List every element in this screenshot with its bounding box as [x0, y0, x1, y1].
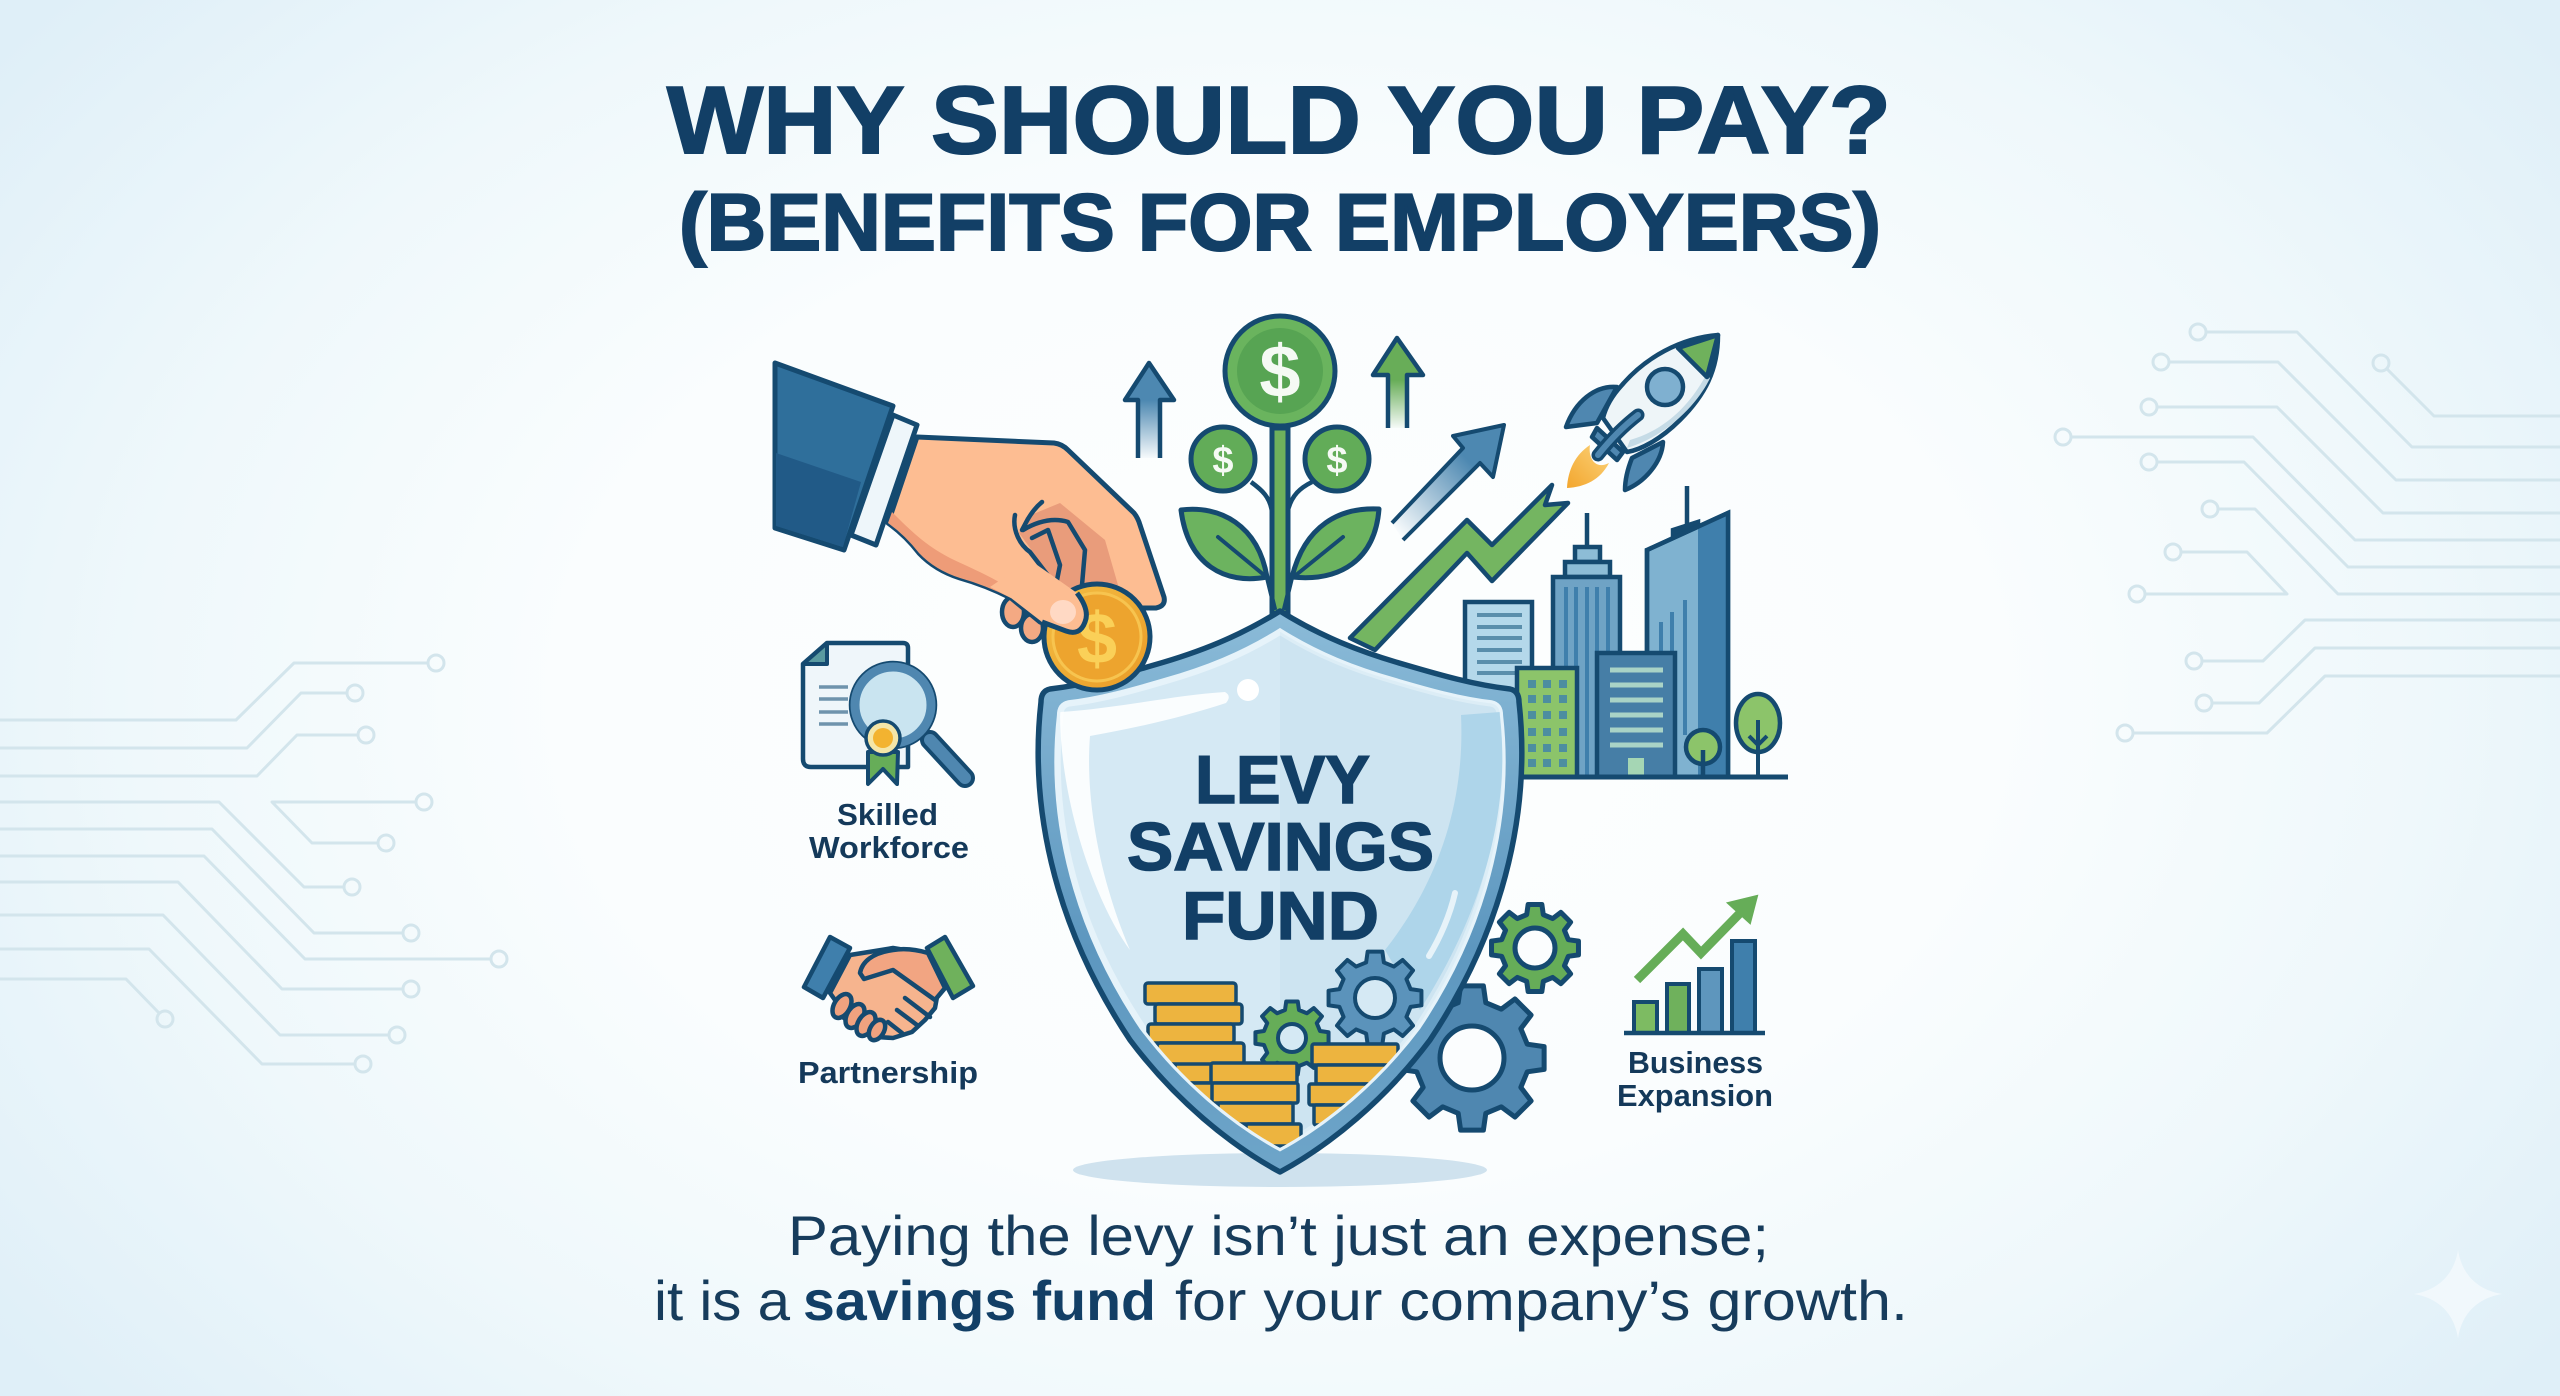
stem: [1272, 428, 1288, 618]
baseline: [1624, 1031, 1765, 1035]
central tower: [1553, 513, 1620, 777]
inner fingers shading: [1019, 503, 1118, 590]
nose: [1678, 335, 1718, 377]
small dollar coin right: $: [1326, 440, 1348, 482]
label: skilled workforce: Skilled: [837, 797, 938, 832]
shield: levy savings fund: [1038, 600, 1540, 1180]
icon: thumb: [990, 560, 1086, 632]
white highlight: [1060, 692, 1229, 950]
shield rim: [1038, 611, 1522, 1172]
left cuff: [804, 937, 850, 998]
rear finger: [1021, 614, 1043, 642]
flame: [1567, 445, 1609, 488]
green arrow: [1637, 908, 1745, 980]
icon: business expansion chart: [1624, 896, 1765, 1033]
icon: growth arrow blue up: [1125, 363, 1174, 458]
arrow head: [1728, 896, 1757, 923]
window: [1647, 369, 1683, 405]
right fin: [1625, 442, 1663, 490]
magnifier ring: [855, 667, 931, 743]
diagonal arrow outline: [1392, 425, 1504, 540]
icon: gold coin: $: [1077, 599, 1117, 679]
closing statement: it is a: [654, 1269, 791, 1332]
closing statement: for your company’s growth.: [1175, 1269, 1908, 1332]
icon: hand dropping coin: [775, 363, 1164, 642]
bottom glow: [1080, 1000, 1480, 1180]
centre fin fill: [1598, 415, 1638, 455]
label: skilled workforce: [809, 797, 969, 865]
branches: [1251, 482, 1312, 610]
magnifier lens: [851, 663, 935, 747]
shield ground shadow: [1073, 1153, 1487, 1187]
finger lines: [888, 998, 930, 1033]
title: WHY SHOULD YOU PAY?: [667, 67, 1891, 174]
label: business expansion: [1617, 1045, 1773, 1113]
title: (BENEFITS FOR EMPLOYERS): [679, 178, 1881, 268]
handle fill: [930, 740, 965, 778]
finger lines: [1014, 502, 1085, 590]
ground line: [1520, 774, 1788, 780]
left leaf: [1181, 509, 1267, 579]
background circuit pattern: right: [2055, 324, 2560, 741]
icon: money plant: [1181, 316, 1379, 618]
icon: diagonal blue arrow: [1392, 425, 1504, 540]
tall glass tower: [1647, 486, 1728, 777]
closing statement: [654, 1204, 1908, 1332]
inner green gear: [1255, 1001, 1329, 1075]
arrow outlines: [1125, 338, 1423, 458]
label: skilled workforce: Workforce: [809, 830, 969, 865]
light building: [1465, 602, 1532, 692]
icon: green growth zigzag: [1350, 485, 1568, 650]
large dollar coin: $: [1259, 330, 1301, 413]
dark front building: [1597, 653, 1675, 777]
rear fingers: [1002, 597, 1024, 627]
document: [803, 643, 908, 767]
label: partnership: Partnership: [798, 1055, 978, 1090]
palm lower shadow: [888, 512, 1015, 598]
cuff: [851, 415, 917, 545]
palm: [888, 437, 1164, 632]
leaf veins: [1218, 537, 1343, 575]
sleeve: [775, 363, 893, 550]
small dollar coin right: [1305, 427, 1369, 491]
icon: document and magnifier: [803, 643, 965, 784]
background circuit pattern: left: [0, 655, 507, 1072]
finger bumps: [829, 991, 889, 1043]
glass body: [1058, 632, 1502, 1148]
icon: growth arrow green up: [1373, 338, 1423, 428]
inner blue gear: [1329, 952, 1421, 1044]
seal centre: [873, 728, 893, 748]
right cuff: [927, 937, 973, 998]
closing statement: savings fund: [803, 1269, 1156, 1332]
shaded body: [1627, 375, 1710, 448]
coin stacks: [1145, 983, 1398, 1146]
glass contents: [1060, 600, 1540, 1180]
shield text: SAVINGS: [1127, 809, 1434, 885]
upper hand: [860, 949, 945, 1000]
large dollar coin: [1225, 316, 1335, 426]
text lines: [819, 687, 848, 724]
page fold: [803, 643, 827, 664]
icon: rocket: [1566, 335, 1718, 490]
hands: [830, 948, 945, 1038]
closing statement: Paying the levy isn’t just an expense;: [788, 1204, 1769, 1267]
title: [667, 67, 1891, 268]
icon: outer blue gear: [1400, 986, 1544, 1130]
large tree: [1736, 694, 1780, 777]
icon: gold coin: [1044, 584, 1150, 690]
label: business expansion: Expansion: [1617, 1078, 1773, 1113]
left fin: [1566, 387, 1617, 427]
bars: [1634, 1002, 1657, 1033]
small dollar coin left: $: [1212, 440, 1234, 482]
shield text: [1127, 742, 1434, 954]
icon: handshake: [804, 937, 973, 1043]
right leaf: [1292, 509, 1379, 578]
shield text: FUND: [1182, 878, 1379, 954]
seal: [866, 721, 900, 755]
green building: [1517, 668, 1577, 777]
icon: outer green gear: [1492, 905, 1578, 991]
centre fin: [1598, 415, 1638, 455]
sleeve shadow: [776, 453, 861, 547]
seal ribbon: [868, 752, 898, 784]
magnifier handle: [930, 740, 965, 778]
label: business expansion: Business: [1628, 1045, 1763, 1080]
right reflection band: [1385, 712, 1502, 1010]
icon: sparkle watermark: [2414, 1250, 2502, 1338]
nozzle: [1592, 428, 1623, 460]
shield text: LEVY: [1195, 742, 1370, 818]
small tree: [1686, 730, 1720, 777]
body: [1603, 335, 1718, 452]
city skyline: [1465, 486, 1788, 777]
small dollar coin left: [1191, 427, 1255, 491]
